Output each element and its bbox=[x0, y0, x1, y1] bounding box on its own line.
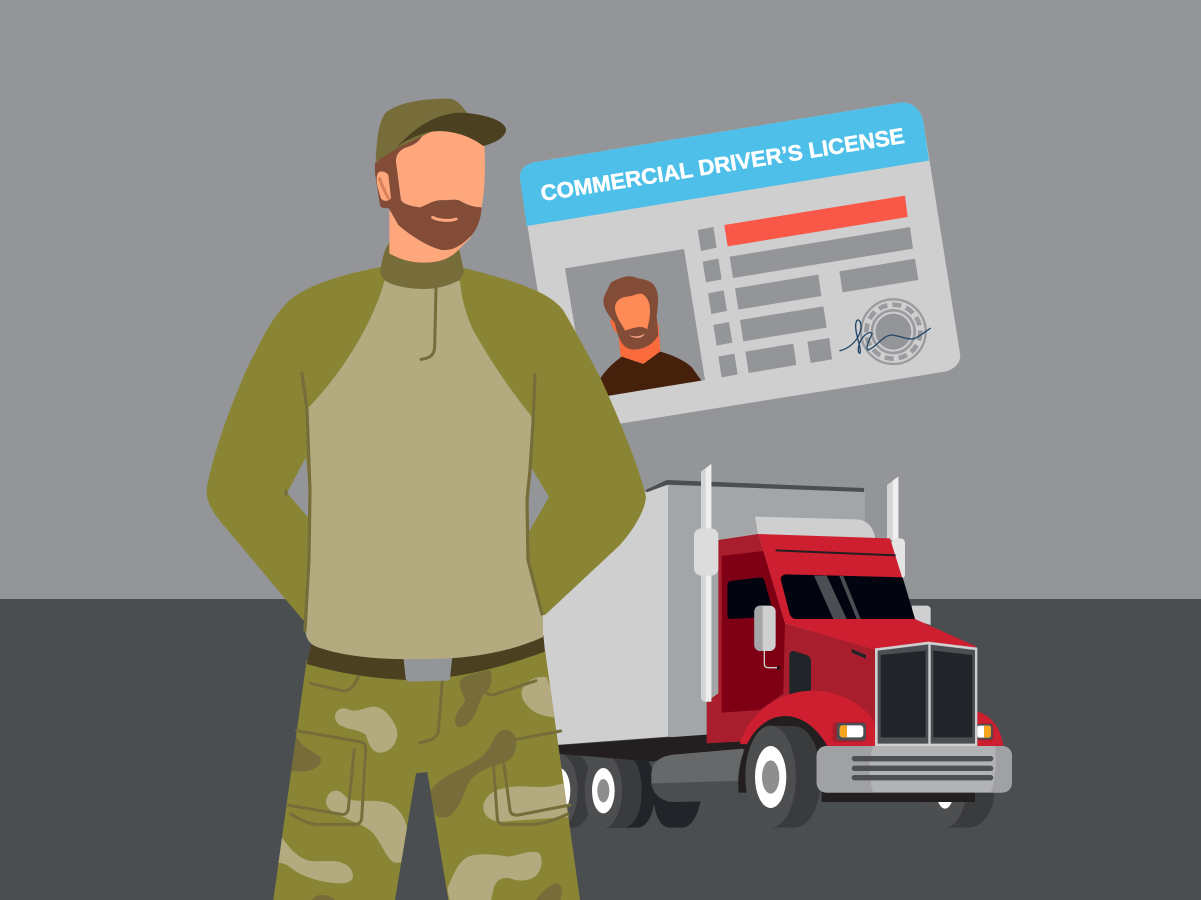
cap bbox=[376, 99, 506, 162]
hood side panel bbox=[789, 651, 811, 697]
hair and beard bbox=[375, 134, 482, 250]
cab side bbox=[707, 534, 875, 747]
background ground bbox=[0, 599, 1201, 900]
right gap bbox=[526, 467, 549, 537]
cab roof fairing bbox=[719, 517, 875, 542]
front bumper bbox=[817, 746, 1012, 793]
card body bbox=[520, 102, 960, 433]
card title: COMMERCIAL DRIVER’S LICENSE bbox=[539, 123, 906, 206]
windshield bbox=[781, 574, 915, 619]
front fender bbox=[738, 691, 875, 793]
side vent bbox=[852, 649, 866, 659]
exhaust stack left bbox=[694, 464, 718, 702]
signature bbox=[840, 320, 930, 353]
chassis rail bbox=[553, 735, 747, 762]
head bbox=[375, 128, 485, 250]
front face of cab and hood bbox=[758, 534, 977, 650]
exhaust stack right bbox=[887, 477, 905, 579]
face bbox=[396, 128, 485, 207]
right fender bbox=[977, 712, 1003, 747]
under bumper shadow bbox=[822, 790, 975, 802]
mouth bbox=[433, 217, 456, 220]
fuel tank bbox=[651, 749, 743, 802]
ear bbox=[377, 172, 391, 201]
left headlight bbox=[833, 722, 866, 742]
torso shirt bbox=[305, 278, 543, 659]
sleeve seams bbox=[302, 373, 542, 630]
camouflage pants bbox=[267, 650, 580, 900]
front wheel bbox=[745, 726, 821, 828]
arm crease mark bbox=[284, 489, 288, 497]
belt buckle bbox=[403, 657, 452, 682]
red name bar bbox=[724, 196, 908, 246]
collar and zipper bbox=[380, 237, 464, 359]
trailer bbox=[533, 480, 865, 747]
near mirror bbox=[754, 606, 780, 669]
commercial driver's license card bbox=[520, 102, 960, 433]
belt bbox=[307, 635, 545, 682]
far mirror bbox=[912, 606, 931, 625]
pocket and seam lines bbox=[287, 677, 570, 824]
stamp seal bbox=[861, 299, 926, 364]
cab door bbox=[722, 551, 785, 713]
arms bbox=[207, 267, 646, 620]
rear wheels bbox=[541, 753, 702, 828]
background wall bbox=[0, 0, 1201, 600]
camouflage patches bbox=[267, 670, 573, 900]
data fields bbox=[698, 227, 918, 377]
neck bbox=[389, 210, 472, 263]
gaps between arms and torso bbox=[287, 457, 312, 522]
right headlight bbox=[977, 723, 993, 741]
ID photo bbox=[565, 249, 705, 396]
side window bbox=[727, 577, 772, 619]
soldier figure bbox=[207, 99, 646, 900]
grille bbox=[875, 642, 977, 746]
roof line bbox=[776, 550, 896, 555]
cap bill bbox=[397, 113, 506, 147]
semi truck bbox=[533, 464, 1012, 828]
far front wheel bbox=[922, 732, 995, 828]
cap crown bbox=[376, 99, 468, 162]
